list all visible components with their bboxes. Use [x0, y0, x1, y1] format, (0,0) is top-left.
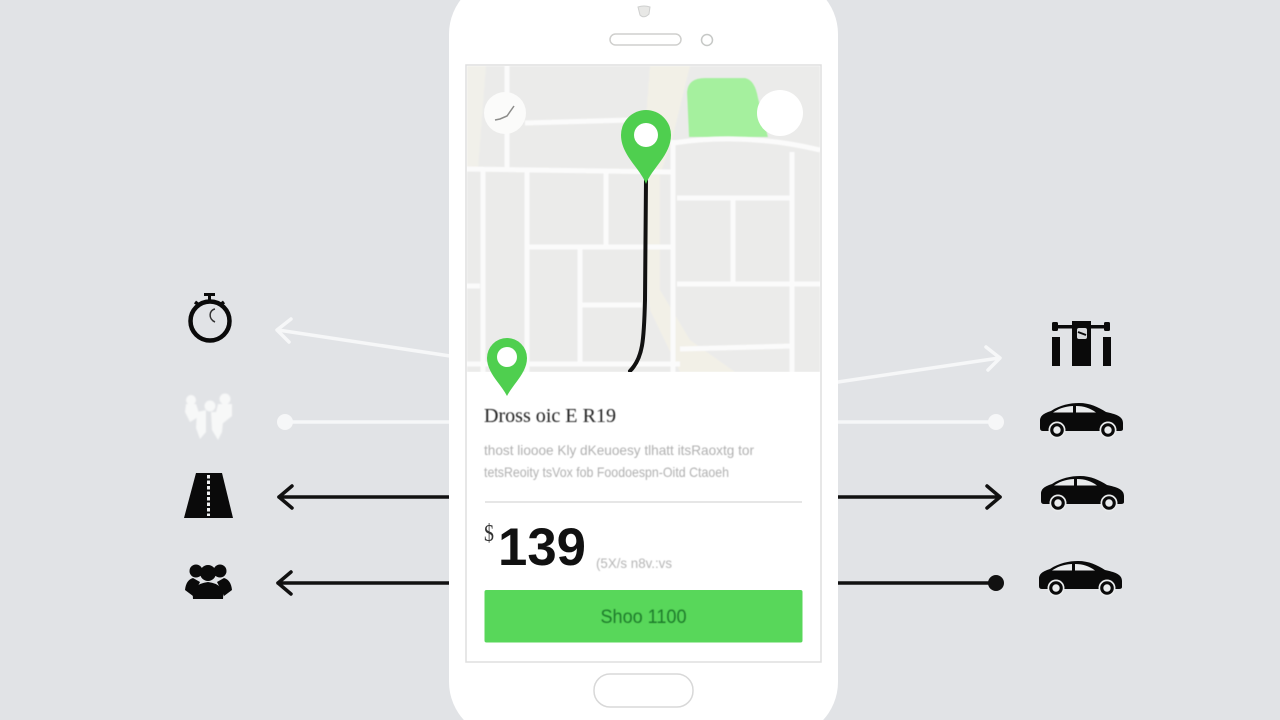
phone [449, 0, 838, 720]
info panel [467, 338, 820, 661]
panel title: Dross oic E R19 [484, 405, 616, 427]
phone sensor [702, 34, 712, 46]
map roads [467, 66, 820, 372]
map park [687, 78, 768, 137]
icon: car top [1040, 403, 1123, 438]
icon: stopwatch [190, 293, 230, 340]
icon: group of people [185, 564, 232, 599]
right connector: white arrow to gate icon [838, 347, 1000, 382]
pin: origin [487, 338, 527, 396]
right connector: black dot line to car [838, 575, 1004, 591]
panel background [467, 372, 820, 661]
left connector: black arrow to group [278, 572, 450, 594]
left connector: white dot line to people [277, 414, 450, 430]
left connector: white arrow to stopwatch [277, 319, 450, 356]
price: 139 [498, 518, 586, 577]
phone home button [594, 674, 693, 707]
map [467, 66, 820, 372]
panel divider [485, 501, 802, 503]
icon: car bottom [1039, 561, 1122, 596]
icon: gate [1052, 321, 1111, 366]
panel description: tetsReoity tsVox fob Foodoespn-Oitd Ctaoeh [484, 464, 729, 480]
phone speaker [610, 34, 681, 45]
price note: (5X/s n8v.:vs [596, 555, 672, 571]
price: $ [484, 521, 494, 547]
left connector: black arrow to road [279, 486, 450, 508]
book button: Shoo 1100 [600, 607, 686, 628]
book button [484, 590, 802, 642]
pin: destination [621, 110, 671, 184]
phone body [449, 0, 838, 720]
phone screen frame [466, 65, 821, 662]
panel description: thost lioooe Kly dKeuoesy tlhatt itsRaoxtg tor [484, 442, 754, 458]
phone front camera [638, 6, 650, 17]
map badge: route icon [484, 92, 526, 134]
right connector: black arrow to car [838, 486, 1000, 508]
map base [467, 66, 820, 372]
panel description [484, 442, 754, 480]
map badge: white circle [757, 90, 803, 136]
icon: road [184, 473, 233, 518]
map beige route band [645, 66, 735, 372]
icon: white people [185, 394, 232, 440]
right connector: white dot line to car [838, 414, 1004, 430]
icon: car middle [1041, 476, 1124, 512]
route line [630, 180, 646, 371]
map beige corner [467, 66, 486, 170]
